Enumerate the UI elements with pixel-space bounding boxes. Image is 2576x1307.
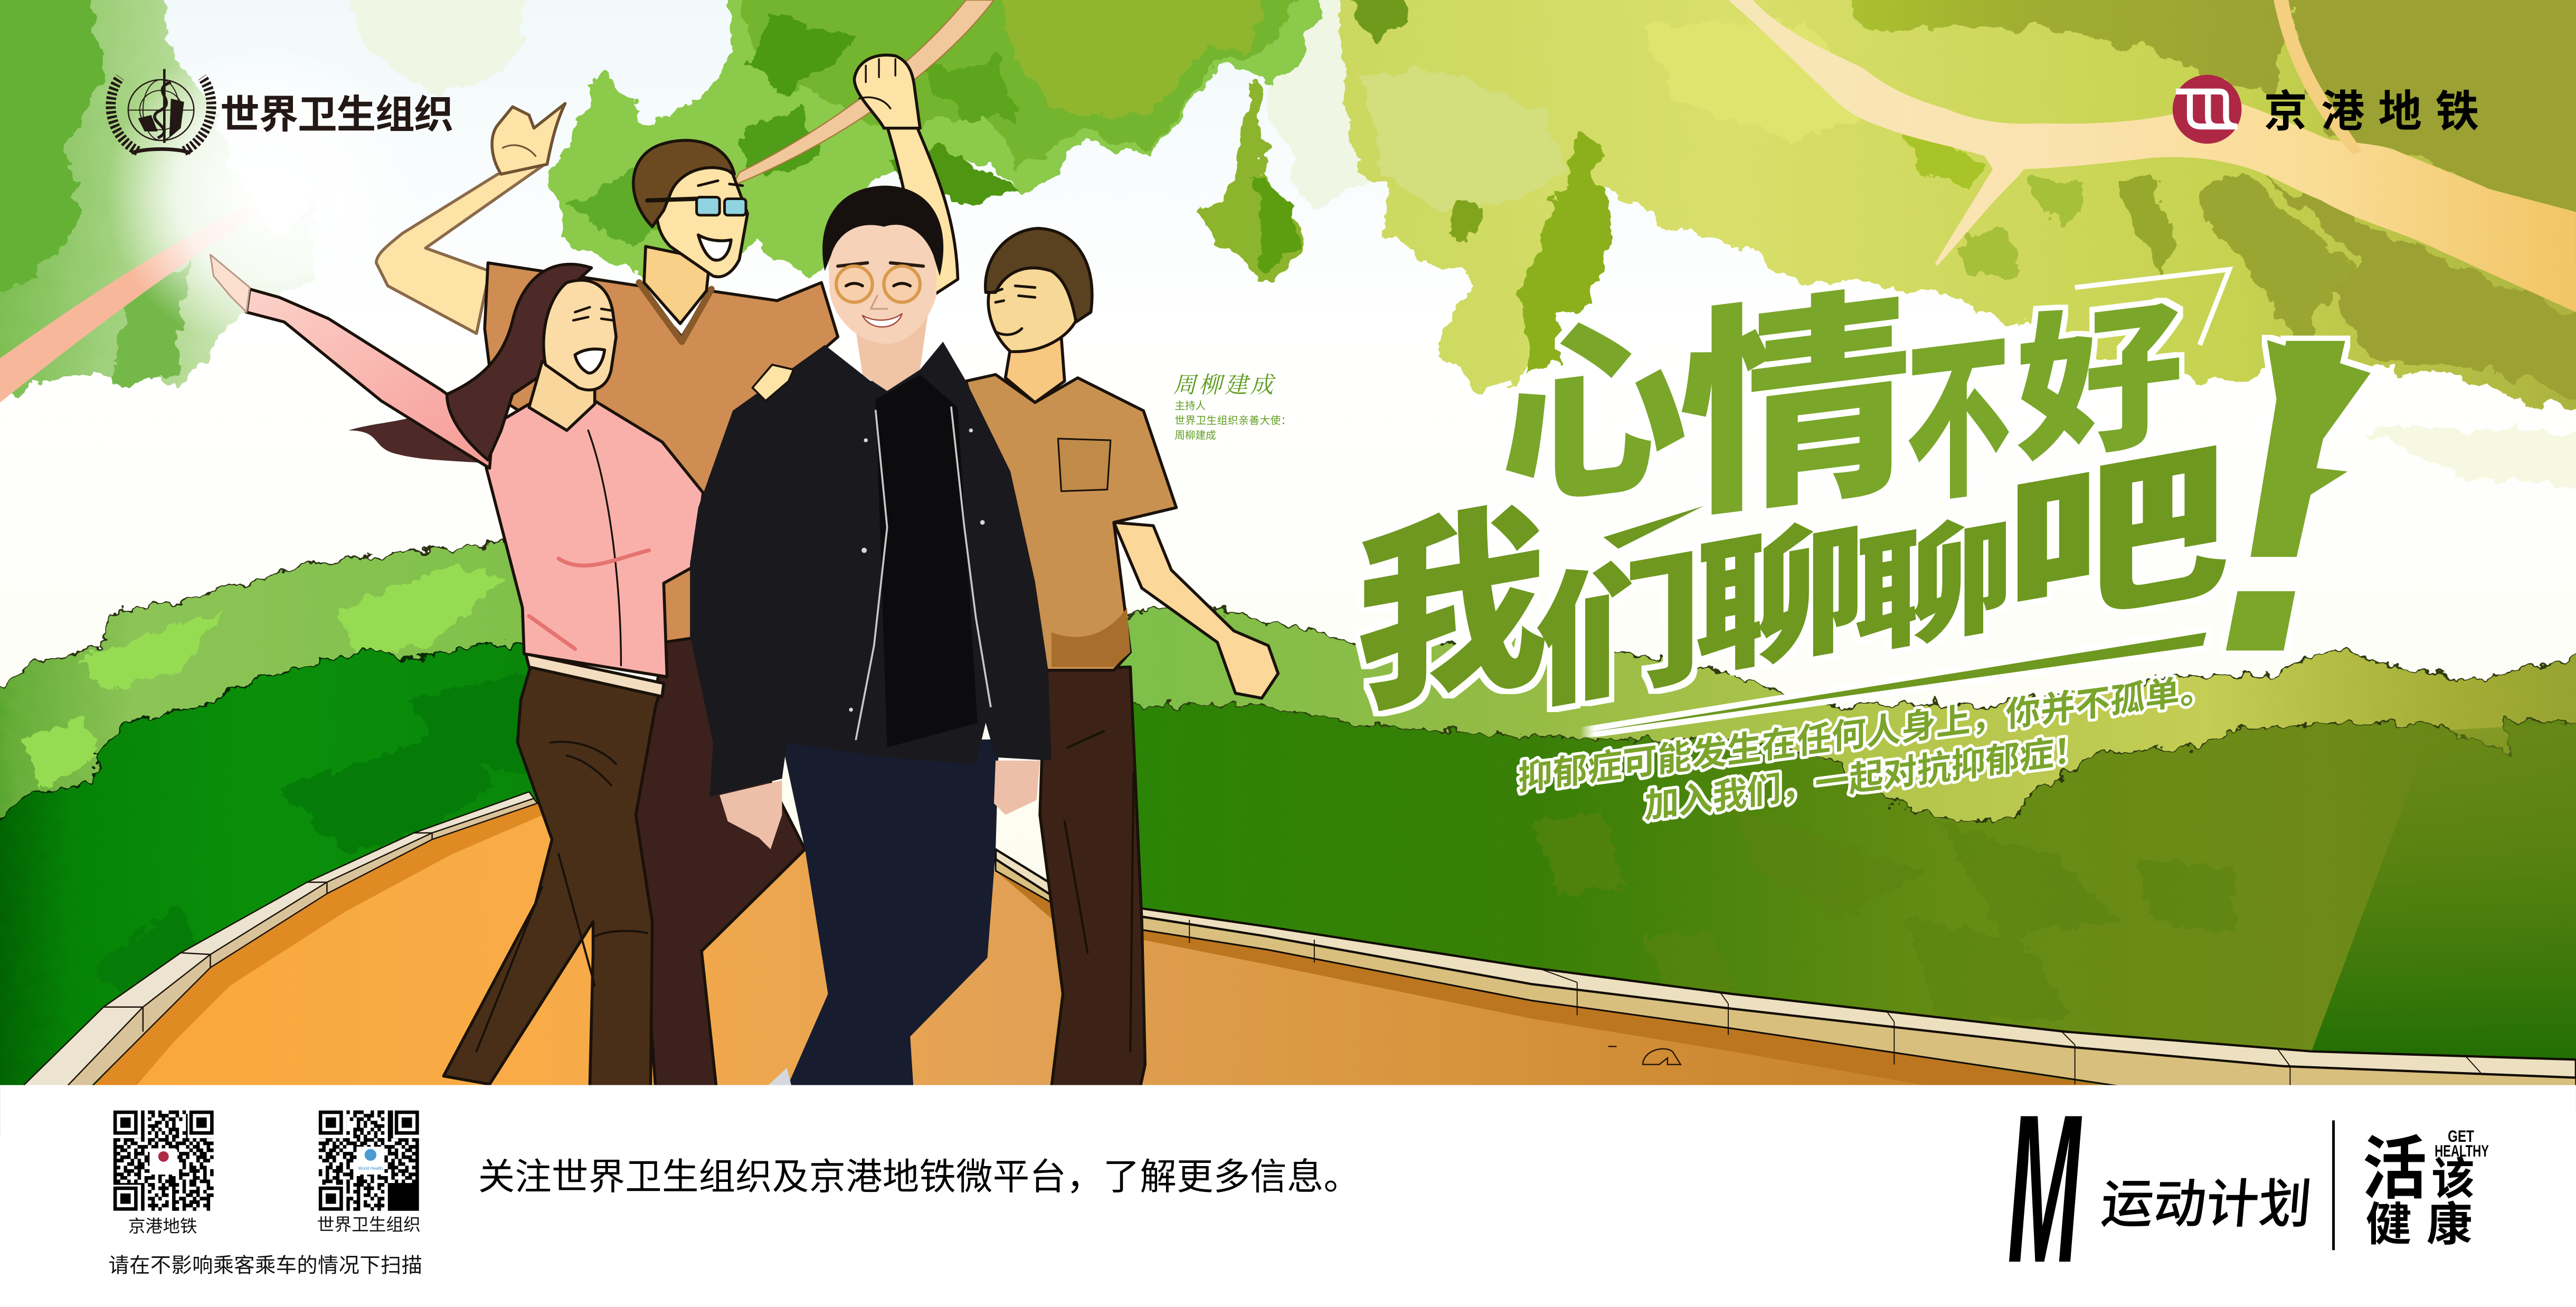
follow message: 关注世界卫生组织及京港地铁微平台，了解更多信息。 (478, 1156, 1360, 1197)
exclamation mark: ! (2168, 243, 2403, 746)
illustrated group of people (210, 55, 1278, 1087)
lightning accent (2259, 340, 2371, 527)
headline line two: 我 (1356, 483, 1548, 739)
left kerb (23, 792, 537, 1086)
neck (529, 362, 595, 430)
GET HEALTHY (2435, 1127, 2489, 1160)
GET HEALTHY: HEALTHY (2435, 1142, 2489, 1160)
raised hand left (492, 103, 565, 174)
trousers (443, 660, 662, 1087)
host caption: 主持人 (1175, 400, 1206, 412)
face (544, 280, 616, 390)
subtitle: 抑郁症可能发生在任何人身上，你并不孤单。 (1518, 669, 2214, 798)
WHO QR centre badge (356, 1147, 384, 1175)
left kerb shadow (92, 803, 558, 1087)
right tree branches (1728, 0, 2576, 312)
MTR QR modules (112, 1109, 217, 1214)
headline line two (1356, 425, 2229, 739)
eyebrows (698, 181, 743, 186)
face details (992, 286, 1035, 335)
Get Healthy logo: 康 (2427, 1199, 2473, 1251)
footer band (0, 1070, 2576, 1307)
MTR QR centre badge (149, 1148, 177, 1175)
subtitle: 加入我们，一起对抗抑郁症！ (1644, 730, 2088, 826)
headline line one: 不 (1906, 317, 2011, 525)
hair (986, 229, 1092, 322)
M campaign logo (2007, 1070, 2314, 1306)
jacket studs (849, 429, 985, 712)
headline line one (1500, 271, 2183, 545)
right hedge (1117, 600, 2576, 1117)
WHO wordmark: 世界卫生组织 (220, 92, 453, 137)
left tree branch (0, 205, 254, 402)
sweater (485, 263, 838, 644)
brush M: M (2007, 1070, 2083, 1306)
light band (0, 541, 558, 920)
trousers (782, 739, 999, 1087)
headline line two: 聊 (1694, 503, 1866, 695)
shirt body (485, 401, 703, 677)
pale background foliage (329, 0, 2576, 493)
host in black jacket (690, 186, 1052, 1087)
right hand (994, 761, 1040, 815)
main branch (1728, 0, 2576, 312)
headline line one: 好 (2016, 285, 2183, 482)
left hedge (0, 541, 558, 1150)
WHO QR code (317, 1109, 422, 1214)
headline corner marks (1479, 269, 2229, 408)
hair (447, 264, 591, 460)
host caption: 世界卫生组织亲善大使： (1175, 415, 1291, 427)
head (657, 162, 747, 277)
headline line one: 情 (1679, 271, 1912, 545)
man with glasses (376, 55, 958, 1087)
headline line two: 聊 (1853, 501, 2014, 671)
undershirt (876, 375, 978, 747)
eyes (846, 283, 910, 286)
shirt placket (588, 430, 621, 665)
hair (822, 186, 943, 276)
signature block (1173, 373, 1291, 441)
WHO emblem (111, 69, 211, 153)
right zip (951, 408, 991, 706)
left hand (719, 780, 782, 849)
hand on shoulder (752, 365, 793, 401)
shaded right hedge (2312, 723, 2576, 1068)
jacket (690, 342, 1052, 797)
face (828, 219, 936, 344)
pocket (1058, 439, 1111, 491)
mouth (575, 349, 604, 373)
WHO QR code: World Health (358, 1166, 383, 1171)
headline line two: 们 (1535, 538, 1702, 727)
neck (644, 247, 710, 324)
centre tree foliage (551, 0, 1339, 282)
road (92, 803, 2118, 1087)
raised arm left (376, 163, 547, 334)
slogan lower: 健 (2366, 1199, 2412, 1251)
raised arm right (887, 127, 958, 304)
hand (210, 254, 250, 312)
right tree foliage (1336, 0, 2576, 419)
slogan upper: 活 (2362, 1131, 2427, 1207)
arm (1114, 523, 1278, 698)
sun glare (107, 38, 419, 350)
neck (1006, 337, 1065, 402)
waistband (526, 654, 664, 697)
WHO QR caption: 世界卫生组织 (317, 1215, 421, 1234)
man in tan t-shirt (966, 229, 1278, 1087)
light band (1117, 600, 2576, 920)
footer background (0, 1085, 2576, 1307)
Get Healthy logo (2362, 1127, 2489, 1251)
trousers (636, 638, 805, 1087)
right kerb shadow (996, 870, 2118, 1087)
right kerb (996, 849, 2576, 1086)
signature: 周柳建成 (1173, 373, 1276, 398)
campaign name: 运动计划 (2098, 1176, 2314, 1234)
underline swoosh (1585, 632, 2206, 733)
MTR QR caption: 京港地铁 (128, 1216, 197, 1236)
flying hair (348, 394, 488, 463)
hair (633, 140, 734, 226)
eyebrows (838, 263, 923, 266)
WHO QR modules (317, 1109, 422, 1214)
headline line one: 心 (1500, 299, 1687, 533)
nose (871, 296, 887, 309)
pebbles (1608, 1046, 1681, 1065)
MTR wordmark: 京港地铁 (2264, 88, 2479, 136)
shirt folds (529, 551, 649, 649)
MTR QR code (112, 1109, 217, 1214)
smile (863, 314, 902, 327)
mouth (698, 235, 731, 260)
trouser folds (477, 742, 647, 1052)
shirt shadow (1052, 608, 1130, 667)
glasses (647, 197, 746, 215)
left zip (856, 411, 887, 739)
woman in pink shirt (210, 254, 703, 1087)
t-shirt (966, 375, 1176, 670)
trousers (1040, 667, 1145, 1087)
Get Healthy logo: 该 (2431, 1154, 2475, 1204)
raised hand right (854, 55, 920, 128)
headline line two: 吧 (2004, 425, 2229, 654)
left tree foliage (0, 0, 320, 402)
host caption (1175, 400, 1291, 441)
MTR logo (2173, 75, 2479, 144)
neck (854, 312, 928, 391)
centre tree branch (733, 0, 994, 186)
trouser folds (1065, 731, 1133, 1052)
host caption: 周柳建成 (1175, 430, 1216, 441)
WHO logo (111, 69, 453, 153)
upper branch (2274, 0, 2362, 155)
eyes (573, 307, 613, 320)
shoe (765, 1068, 792, 1087)
accent wedge (1604, 506, 1703, 548)
glasses (836, 266, 920, 302)
MTR roundel (2173, 75, 2242, 144)
GET HEALTHY: GET (2448, 1127, 2474, 1145)
dark band (1117, 703, 2576, 1117)
logo divider (2332, 1120, 2335, 1250)
head (988, 257, 1078, 352)
scan notice: 请在不影响乘客乘车的情况下扫描 (109, 1254, 422, 1277)
v-neck (639, 282, 712, 342)
headline (1356, 243, 2403, 746)
dark band (0, 644, 558, 1150)
raised arm (247, 289, 493, 468)
